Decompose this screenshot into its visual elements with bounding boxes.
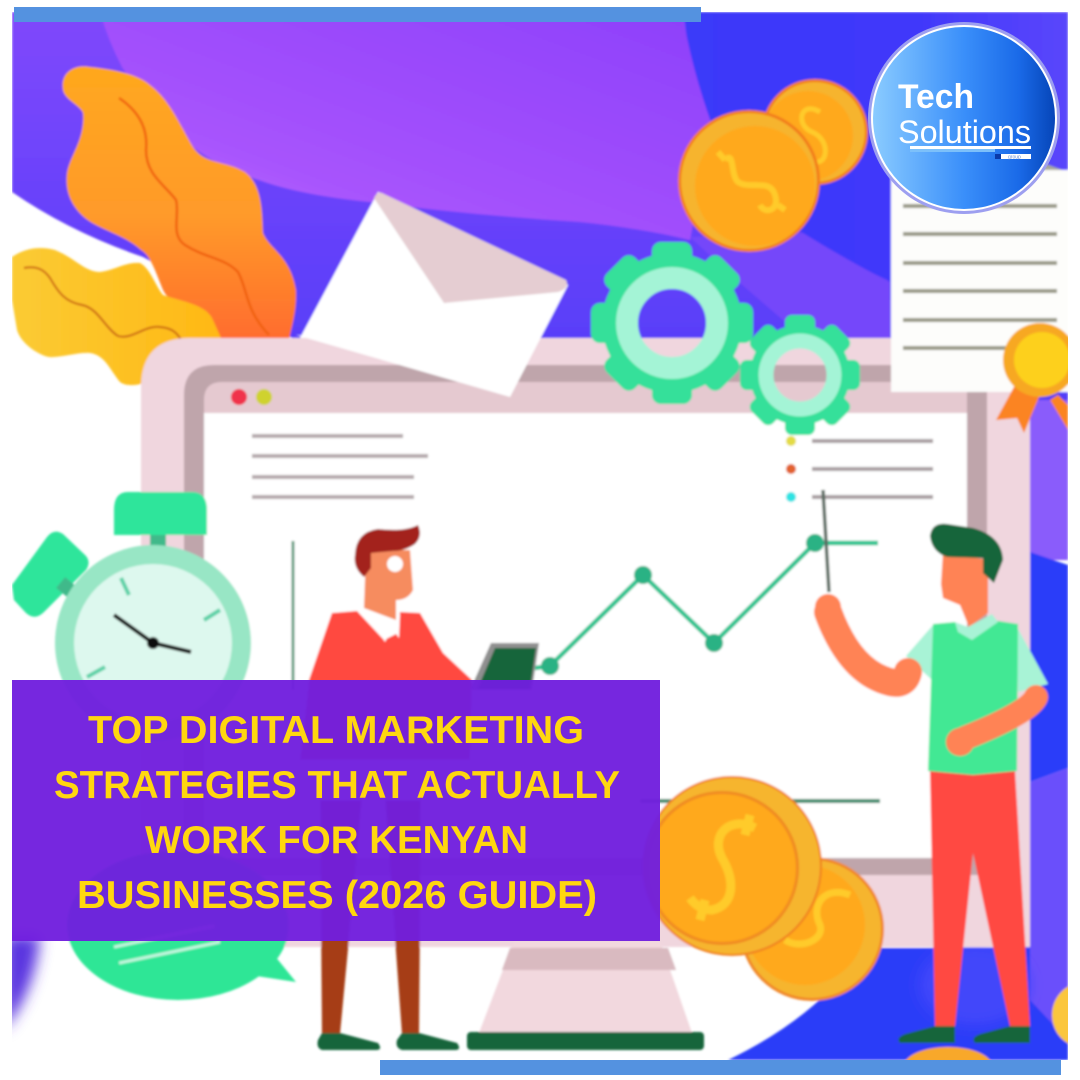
presenter: trousers	[930, 771, 1030, 1026]
presenter: right sleeve	[1016, 625, 1048, 692]
logo: Solutions wordmark: Solutions	[898, 114, 1031, 150]
man: tablet	[470, 643, 539, 690]
background: right violet strip	[1030, 400, 1068, 560]
monitor stand	[467, 941, 704, 1050]
bottom left smudge	[4, 935, 40, 1030]
background: floor highlight	[920, 945, 1030, 1025]
icon: edge coin bottom	[904, 1047, 992, 1080]
orange leaf	[63, 66, 296, 340]
title text	[54, 709, 620, 917]
presenter: hair	[930, 524, 1003, 583]
icon: award badge	[996, 323, 1077, 433]
monitor: inner bezel	[184, 365, 987, 875]
monitor	[141, 338, 1030, 947]
icon: small gear	[740, 315, 860, 435]
man: hair	[355, 525, 420, 577]
monitor: right legend	[786, 436, 933, 502]
top accent bar	[14, 7, 701, 22]
icon: edge coin right	[1052, 983, 1080, 1047]
background: deep blue wedge	[684, 12, 1068, 300]
presenter: collar	[955, 614, 998, 640]
monitor: white screen	[204, 413, 967, 858]
man: trousers	[320, 800, 421, 1034]
monitor: left text lines	[252, 434, 428, 499]
background: violet sky shape	[12, 12, 1068, 420]
presenter: vest	[928, 620, 1018, 775]
man: sweater	[308, 610, 473, 680]
presenter: pointer	[823, 490, 829, 592]
background: bottom blue floor	[728, 948, 1068, 1060]
icon: stopwatch	[12, 490, 252, 680]
speech bubble	[67, 850, 296, 1000]
title text: TOP DIGITAL MARKETING	[88, 709, 584, 752]
presenter: right arm	[946, 697, 1036, 756]
man: collar	[382, 614, 402, 644]
logo: group tag: group	[1008, 155, 1021, 161]
presenter: left sleeve	[906, 625, 933, 680]
man: glasses	[387, 556, 403, 572]
title text: BUSINESSES (2026 GUIDE)	[77, 874, 597, 917]
monitor: outer casing	[141, 338, 1030, 947]
man: head	[364, 550, 413, 620]
logo badge	[868, 22, 1060, 214]
logo: underline	[910, 146, 1031, 152]
title panel	[12, 680, 660, 941]
logo: group tag	[995, 154, 1031, 161]
line chart	[293, 534, 880, 801]
presenter: head	[941, 552, 988, 627]
envelope	[296, 192, 568, 397]
icon: bottom coin small	[740, 857, 884, 1001]
monitor: window dots	[231, 389, 272, 405]
presenter: shoes	[898, 1026, 1030, 1043]
bottom accent bar	[380, 1060, 1061, 1075]
icon: top coin small	[762, 79, 868, 185]
title text: STRATEGIES THAT ACTUALLY	[54, 764, 620, 807]
background: violet band	[690, 233, 890, 340]
icon: top coin large	[678, 110, 820, 252]
man with tablet	[300, 525, 539, 1050]
monitor: title bar	[203, 381, 968, 414]
logo: Tech wordmark: Tech	[898, 78, 974, 116]
certificate document	[891, 160, 1068, 392]
background: light purple blob	[100, 12, 712, 240]
background: right blue strip	[1030, 552, 1068, 782]
icon: bottom coin large	[642, 776, 822, 956]
title text: WORK FOR KENYAN	[145, 819, 528, 862]
man: shoes	[318, 1033, 459, 1050]
background: lower right violet	[1000, 768, 1068, 1060]
yellow leaf	[12, 248, 222, 385]
icon: large gear	[591, 242, 753, 404]
presenter: pointing arm	[815, 594, 908, 683]
presenter with pointer	[815, 490, 1048, 1043]
